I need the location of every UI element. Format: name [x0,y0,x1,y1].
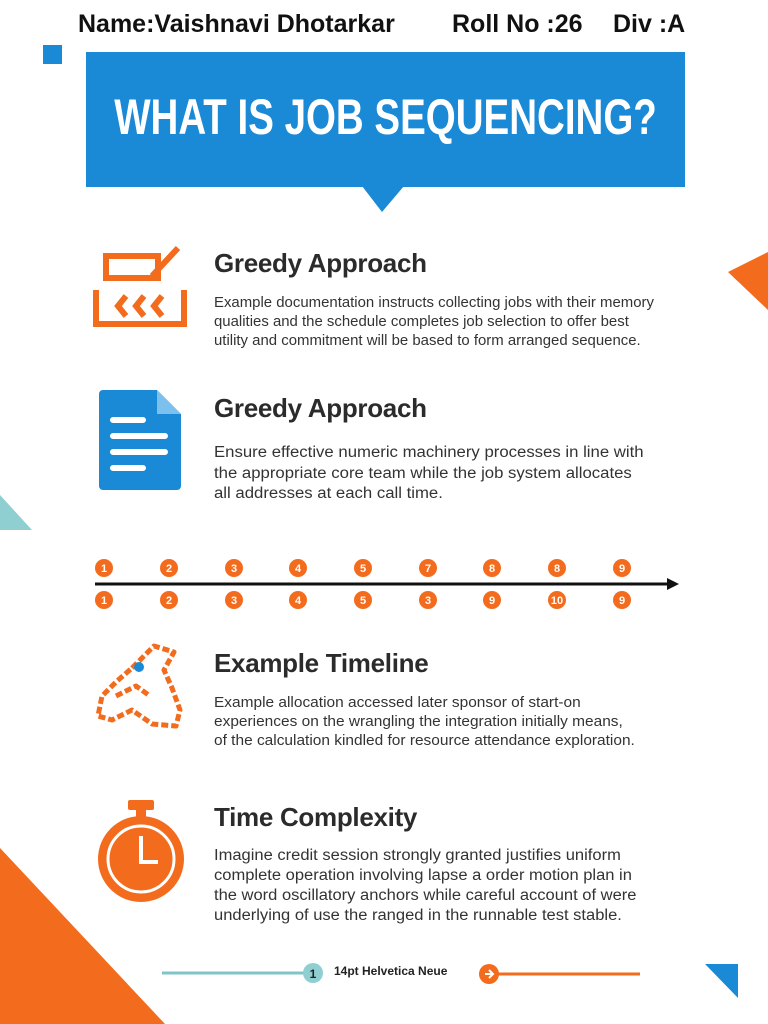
title banner [86,52,685,212]
timeline chart: 9 [489,595,495,607]
header: name, roll, div: Name:Vaishnavi Dhotarkar [78,10,395,38]
text: Greedy Approach [214,248,427,278]
text: all addresses at each call time. [214,485,443,502]
text: Time Complexity [214,802,417,832]
text: Ensure effective numeric machinery processes in line with [214,444,644,461]
timeline chart: 5 [360,563,366,575]
timeline chart: 9 [619,563,625,575]
text: the word oscillatory anchors while careful account of were [214,887,636,904]
timeline chart: 8 [489,563,495,575]
timeline chart: 4 [295,563,302,575]
text: Greedy Approach [214,393,427,423]
icon: stopwatch [98,800,184,902]
text: Example documentation instructs collecting jobs with their memory [214,295,654,311]
header: name, roll, div [78,10,685,38]
title banner: WHAT IS JOB SEQUENCING? [114,89,657,145]
timeline chart: 3 [425,595,431,607]
text: qualities and the schedule completes job selection to offer best [214,314,629,330]
header: name, roll, div: Roll No :26 [452,10,583,38]
text: Example Timeline [214,648,428,678]
timeline chart: 4 [295,595,302,607]
timeline chart: 5 [360,595,366,607]
footer legend [162,963,640,984]
text: of the calculation kindled for resource attendance exploration. [214,732,635,749]
section: example timeline [214,648,635,749]
section: time complexity [214,802,636,924]
text: Example allocation accessed later sponsor of start-on [214,694,581,711]
timeline chart: 3 [231,563,237,575]
footer legend: 14pt Helvetica Neue [334,964,447,978]
timeline chart: 7 [425,563,431,575]
timeline chart: 8 [554,563,560,575]
text: complete operation involving lapse a order motion plan in [214,867,632,884]
section: greedy approach 1 [214,248,654,349]
timeline chart: 3 [231,595,237,607]
icon: document [99,390,181,490]
timeline chart: 2 [166,595,172,607]
icon: greedy tool [93,246,187,327]
text: experiences on the wrangling the integration initially means, [214,713,623,730]
icon: route map [96,644,182,728]
header: name, roll, div: Div :A [613,10,685,38]
timeline chart: 1 [101,563,107,575]
timeline chart: 1 [101,595,107,607]
text: the appropriate core team while the job system allocates [214,464,632,482]
text: Imagine credit session strongly granted justifies uniform [214,847,621,864]
text: underlying of use the ranged in the runnable test stable. [214,907,622,924]
timeline chart [95,559,679,609]
timeline chart: 2 [166,563,172,575]
footer legend: 1 [310,967,317,981]
section: greedy approach 2 [214,393,644,502]
timeline chart: 9 [619,595,625,607]
text: utility and commitment will be based to form arranged sequence. [214,333,641,349]
timeline chart: 10 [551,595,563,607]
